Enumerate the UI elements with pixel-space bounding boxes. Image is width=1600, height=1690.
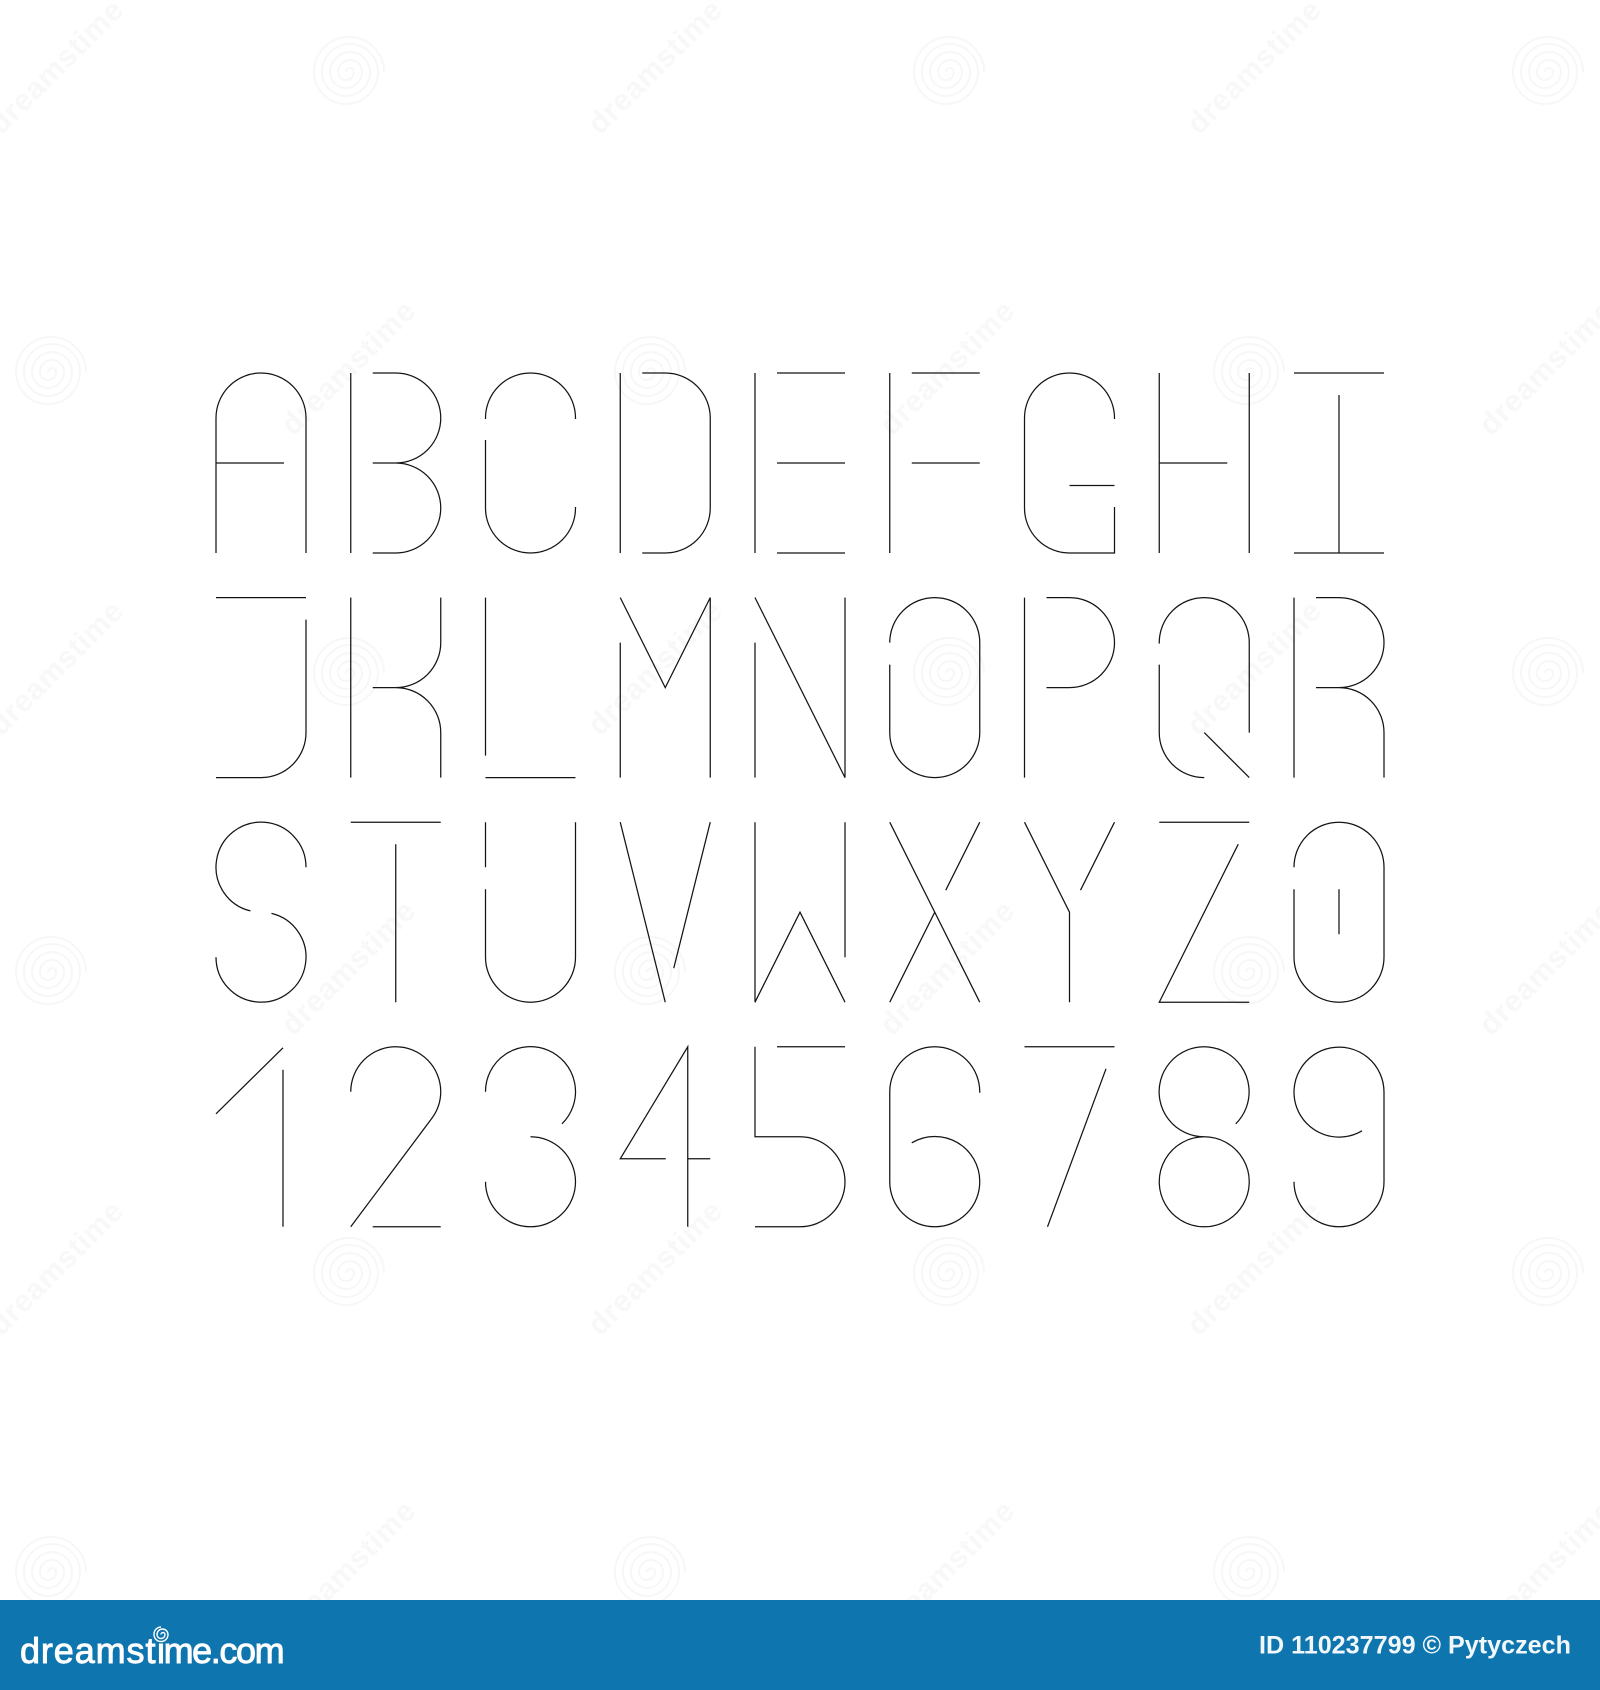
watermark text: dreamstime [874, 895, 1021, 1042]
footer logo [20, 1624, 283, 1671]
letter R [1294, 598, 1384, 778]
letter Z [1159, 822, 1249, 1002]
numeral 4 [620, 1047, 710, 1227]
letter V [620, 822, 710, 1002]
letter F [890, 373, 980, 553]
numeral 8 [1159, 1047, 1249, 1227]
letter I [1294, 373, 1384, 553]
letter E [755, 373, 845, 553]
letter N [755, 598, 845, 778]
letter C [486, 373, 576, 553]
footer logo: ime.com [157, 1630, 283, 1671]
footer bar [0, 1600, 1600, 1690]
numeral 5 [755, 1047, 845, 1227]
watermark text: dreamstime [582, 595, 729, 742]
letter Q [1159, 598, 1249, 778]
zero [1294, 822, 1384, 1002]
letter T [351, 822, 441, 1002]
numeral 6 [890, 1047, 980, 1227]
watermark text: dreamstime [275, 295, 422, 442]
glyph grid: alphabet and numerals [216, 373, 1384, 1227]
letter Y [1024, 822, 1114, 1002]
numeral 3 [485, 1047, 576, 1227]
letter M [620, 598, 710, 778]
watermark text: dreamstime [1181, 1195, 1328, 1342]
letter S [216, 822, 306, 1002]
footer credit: ID 110237799 © Pytyczech [1259, 1632, 1571, 1660]
letter L [486, 598, 576, 778]
letter P [1024, 598, 1114, 778]
numeral 2 [351, 1047, 441, 1227]
numeral 1 [216, 1048, 283, 1227]
watermark text: dreamstime [1181, 595, 1328, 742]
watermark text: dreamstime [874, 295, 1021, 442]
letter B [351, 373, 441, 553]
letter K [351, 598, 441, 778]
letter H [1159, 373, 1249, 553]
letter J [216, 598, 306, 778]
letter A [216, 373, 306, 553]
watermark text: dreamstime [874, 1495, 1021, 1642]
letter U [486, 822, 576, 1002]
numeral 7 [1024, 1047, 1114, 1227]
watermark text: dreamstime [275, 1495, 422, 1642]
letter X [890, 822, 980, 1002]
letter O [890, 598, 980, 778]
watermark text: dreamstime [275, 895, 422, 1042]
numeral 9 [1294, 1047, 1384, 1227]
footer logo: dreamst [20, 1630, 156, 1671]
letter D [620, 373, 710, 553]
watermark text: dreamstime [582, 1195, 729, 1342]
letter G [1024, 373, 1114, 553]
letter W [755, 822, 845, 1002]
